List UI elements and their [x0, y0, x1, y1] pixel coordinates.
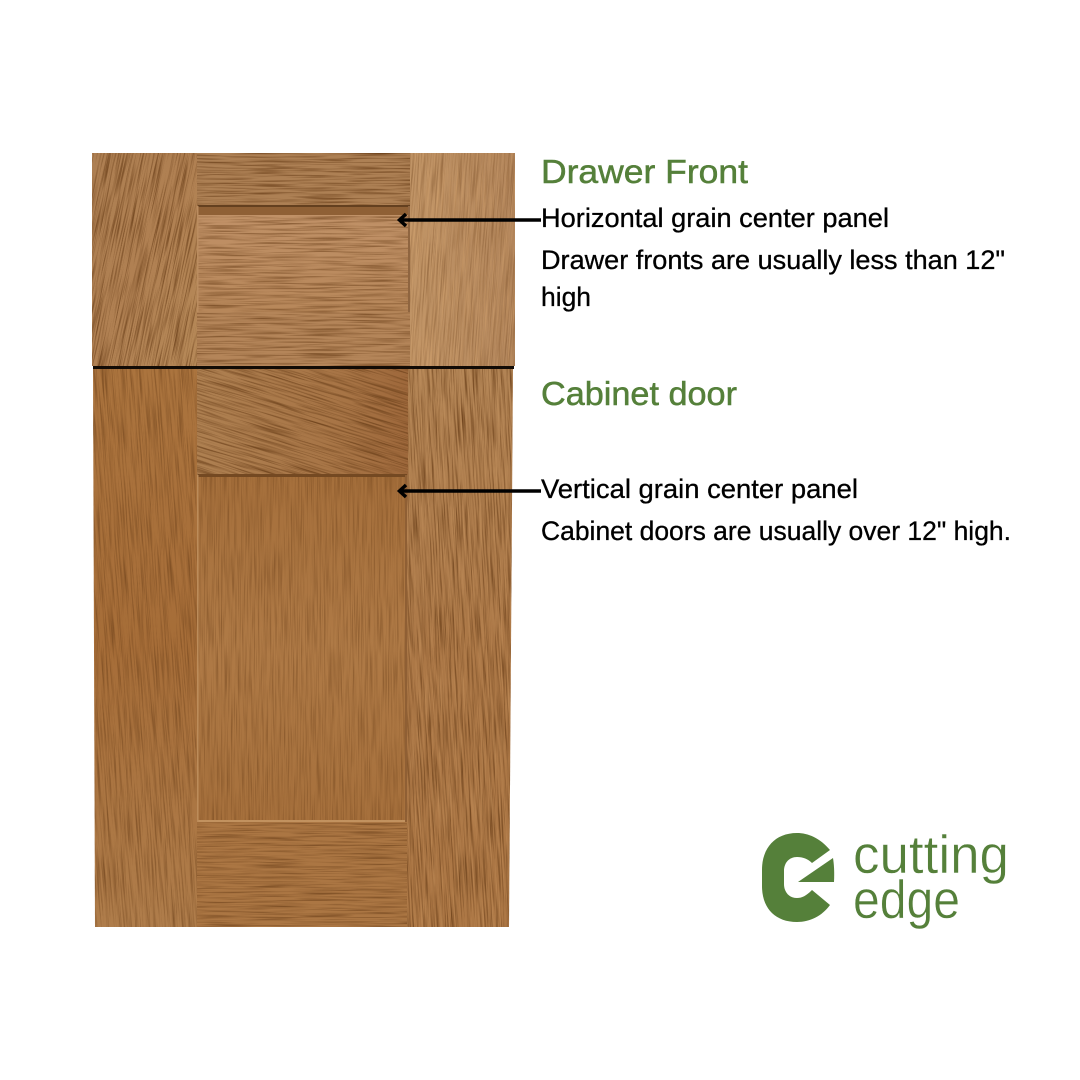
arrow: to door center panel: [400, 485, 541, 497]
panel: drawer front photo: [0, 78, 591, 455]
text block: drawer front notes: Drawer fronts are usually less than 12": [541, 245, 1005, 275]
door top rail: [197, 369, 408, 475]
door left stile: [93, 369, 197, 927]
heading: Cabinet door: Cabinet door: [541, 375, 737, 412]
text block: drawer front notes: Horizontal grain center panel: [541, 203, 889, 233]
text block: drawer front notes: [541, 203, 1005, 312]
arrow: to drawer center panel: [400, 214, 541, 226]
drawer right stile: [410, 153, 515, 366]
heading: Drawer Front: Drawer Front: [541, 153, 748, 190]
drawer top rail: [197, 153, 410, 206]
panel: cabinet door photo: [93, 369, 829, 927]
logo wordmark: cutting: [853, 825, 1009, 885]
icon: C mark with wedge: [762, 833, 834, 922]
text block: cabinet door notes: [541, 474, 1011, 546]
door right stile: [407, 369, 513, 927]
door bottom rail: [197, 822, 407, 927]
text block: cabinet door notes: Cabinet doors are usually over 12" high.: [541, 516, 1011, 546]
logo wordmark: edge: [853, 870, 960, 930]
logo: cutting edge: [762, 825, 1009, 930]
logo wordmark: [853, 825, 1009, 930]
drawer left stile: [92, 153, 197, 366]
drawer center panel, horizontal grain: [197, 205, 410, 312]
text block: drawer front notes: high: [541, 282, 591, 312]
door center panel, vertical grain: [197, 474, 407, 822]
text block: cabinet door notes: Vertical grain center panel: [541, 474, 858, 504]
gap between drawer and door: [93, 366, 514, 369]
drawer bottom rail: [197, 312, 410, 366]
